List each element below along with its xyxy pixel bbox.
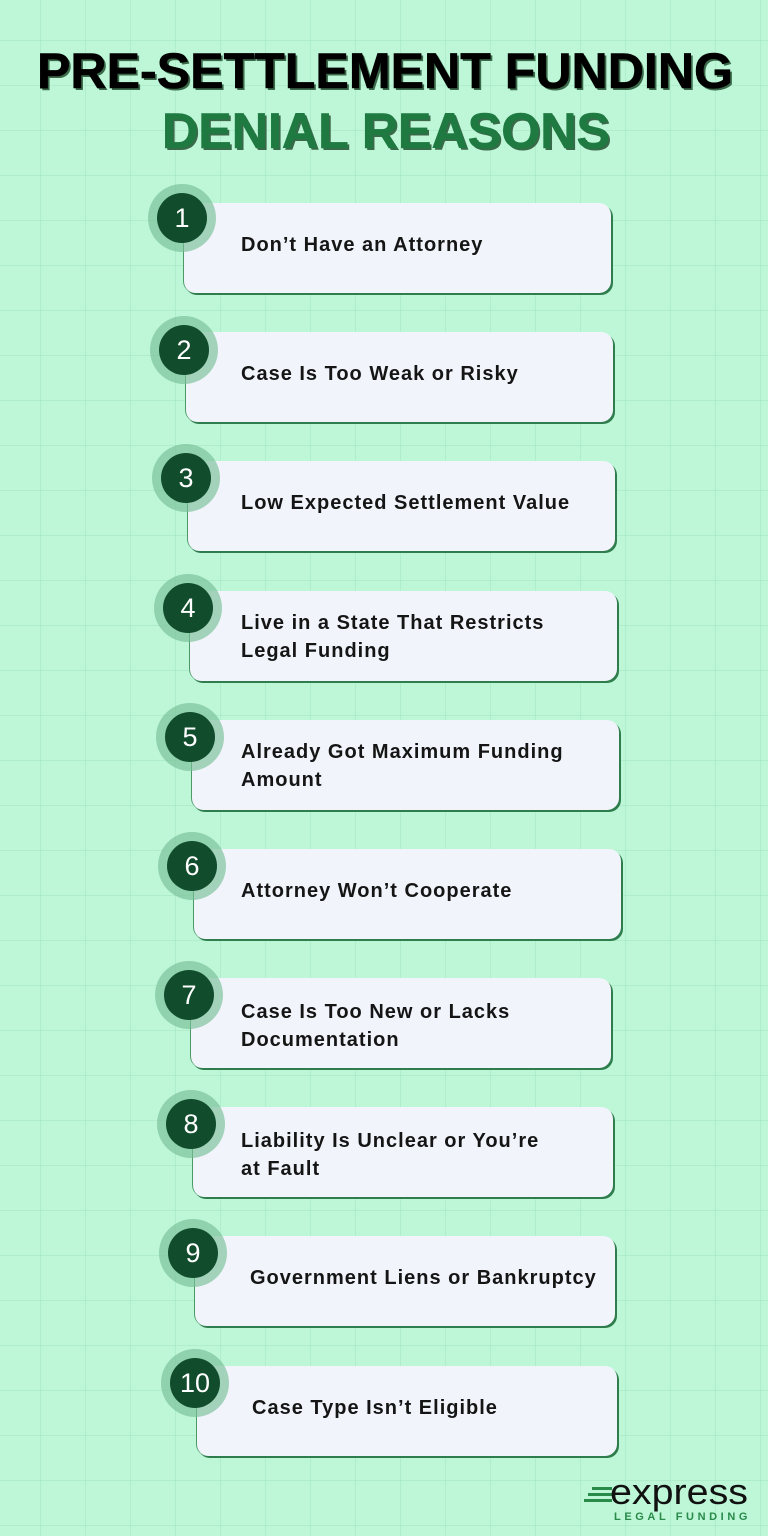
number 5: 5 [182,722,198,752]
item 7: Case Is Too New or Lacks [241,1001,510,1023]
number 2 [159,325,209,375]
number 5 [165,712,215,762]
item 5: Already Got Maximum Funding [241,741,564,763]
item 1 [183,203,611,293]
item 3 [187,461,615,551]
number 3 [161,453,211,503]
item 8: at Fault [241,1158,320,1180]
number 1: 1 [174,203,190,233]
title [37,43,735,161]
item 4: Legal Funding [241,640,391,662]
title: PRE-SETTLEMENT FUNDING [37,43,733,99]
logo: express [610,1471,748,1512]
item 6: Attorney Won’t Cooperate [241,880,512,902]
item 10: Case Type Isn’t Eligible [252,1397,498,1419]
item 5: Amount [241,769,323,791]
number 7 [164,970,214,1020]
item 7: Documentation [241,1029,400,1051]
item 2 [185,332,613,422]
number 4: 4 [180,593,196,623]
item 4: Live in a State That Restricts [241,612,544,634]
item 7 [190,978,611,1068]
item 4 [189,591,617,681]
number 6 [167,841,217,891]
item 3: Low Expected Settlement Value [241,492,570,514]
number 9 [168,1228,218,1278]
number 8 [166,1099,216,1149]
item 9: Government Liens or Bankruptcy [250,1267,597,1289]
logo [584,1471,751,1523]
number 10 [170,1358,220,1408]
item 8: Liability Is Unclear or You’re [241,1130,539,1152]
number 9: 9 [185,1238,201,1268]
number 2: 2 [176,335,192,365]
logo: LEGAL FUNDING [614,1511,751,1523]
number 7: 7 [181,980,197,1010]
item 8 [192,1107,613,1197]
item 2: Case Is Too Weak or Risky [241,363,519,385]
number 8: 8 [183,1109,199,1139]
number 3: 3 [178,463,194,493]
title: PRE-SETTLEMENT FUNDING [39,45,735,101]
item 5 [191,720,619,810]
title: DENIAL REASONS [164,105,612,161]
number 10: 10 [180,1368,210,1398]
number 6: 6 [184,851,200,881]
item 10 [196,1366,617,1456]
number 1 [157,193,207,243]
number 4 [163,583,213,633]
item 1: Don’t Have an Attorney [241,234,483,256]
item 6 [193,849,621,939]
item 9 [194,1236,615,1326]
title: DENIAL REASONS [162,103,610,159]
